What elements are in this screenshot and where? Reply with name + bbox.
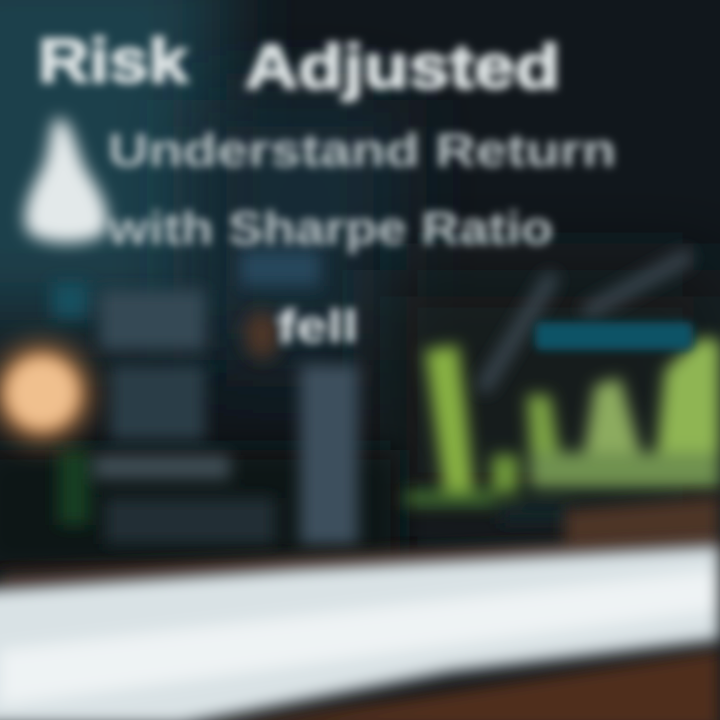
panel: blurred chart columns <box>52 250 358 545</box>
wood table edge <box>0 497 720 720</box>
chart: green bars <box>405 338 720 523</box>
chart: diagonal grey trend lines <box>485 258 685 385</box>
small white label: fell <box>278 300 358 352</box>
heading: title: Risk <box>38 27 189 96</box>
heading: title: Adjusted <box>245 33 560 102</box>
small white label <box>244 300 358 359</box>
callout: teal bar <box>535 322 693 350</box>
heading: title: Understand Return <box>108 124 616 176</box>
heading: title: with Sharpe Ratio <box>107 202 553 254</box>
heading: title <box>38 27 616 254</box>
icon: white bell shape <box>25 118 108 243</box>
icon: glowing orange orb <box>0 345 90 441</box>
panel: white paper <box>0 545 720 720</box>
